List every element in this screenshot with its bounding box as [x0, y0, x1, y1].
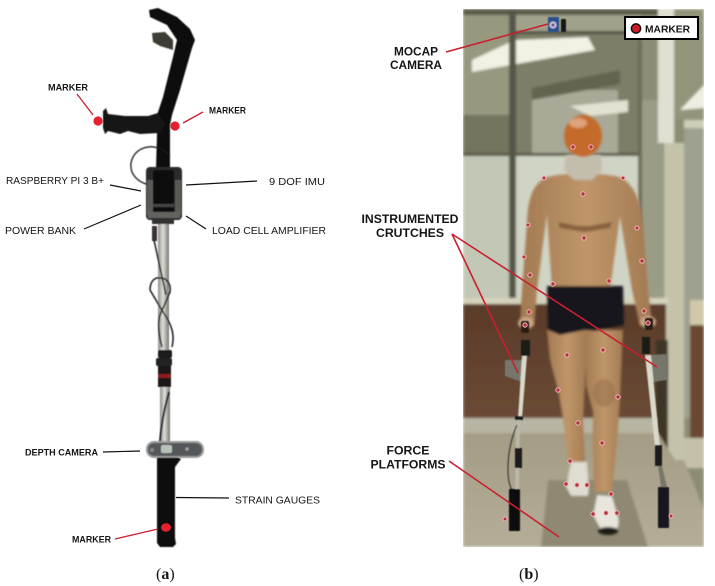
- panel a: instrumented crutch: [5, 8, 326, 583]
- label: instrumented crutches with leaders: CRUTCHES: [376, 228, 444, 240]
- legend: marker: MARKER: [645, 24, 690, 36]
- wire loops: [150, 240, 173, 347]
- label: power bank: [5, 205, 141, 237]
- cable loop: [131, 147, 170, 184]
- neck wrap: [564, 155, 602, 180]
- marker dot: stem: [170, 121, 180, 131]
- label: instrumented crutches with leaders: [362, 214, 657, 373]
- hand grip: [103, 108, 165, 134]
- label: instrumented crutches with leaders: INSTRUMENTED: [362, 214, 458, 226]
- label: depth camera: DEPTH CAMERA: [25, 448, 98, 458]
- upper aluminium tube: [158, 220, 169, 355]
- crutches in photo: [505, 318, 669, 531]
- motion capture camera: [548, 17, 566, 32]
- legs: [547, 330, 587, 462]
- cuff and stem: [149, 8, 195, 168]
- label: marker upper right: [183, 106, 246, 123]
- label: marker bottom: [72, 529, 158, 544]
- person: [518, 115, 656, 535]
- label: 9 dof imu: [186, 176, 325, 188]
- force platform: [541, 480, 648, 547]
- label: marker bottom: MARKER: [72, 534, 111, 544]
- photo scene: [463, 9, 704, 547]
- reflective body markers: [503, 145, 673, 521]
- panel b: motion capture photo: [362, 9, 704, 583]
- caption b: (b): [519, 566, 539, 583]
- label: force platforms with leader: FORCE: [386, 446, 430, 458]
- lower black grip: [157, 456, 181, 547]
- label: force platforms with leader: PLATFORMS: [370, 460, 446, 472]
- label: load cell amplifier: [186, 216, 326, 237]
- background room: [463, 9, 704, 547]
- label: 9 dof imu: 9 DOF IMU: [269, 176, 325, 188]
- lower aluminium tube: [160, 387, 170, 444]
- hands: [518, 317, 534, 329]
- torso and arms: [520, 174, 652, 326]
- label: mocap camera with leader: MOCAP: [394, 46, 438, 58]
- shorts: [547, 286, 624, 335]
- label: marker upper left: MARKER: [48, 82, 89, 92]
- label: raspberry pi: [6, 175, 141, 191]
- crutch photo: [103, 8, 195, 547]
- swim cap head: [564, 115, 602, 157]
- marker dot: bottom of crutch: [161, 523, 171, 532]
- label: depth camera: [25, 448, 140, 458]
- label: mocap camera with leader: CAMERA: [390, 60, 442, 72]
- right crutch: [642, 318, 669, 528]
- label: marker upper right: MARKER: [209, 106, 246, 116]
- label: raspberry pi: RASPBERRY PI 3 B+: [6, 175, 104, 187]
- legend: marker: [625, 17, 698, 39]
- label: strain gauges: STRAIN GAUGES: [235, 494, 320, 506]
- shoes: [566, 462, 589, 496]
- left crutch: [505, 321, 530, 531]
- label: power bank: POWER BANK: [5, 225, 76, 237]
- electronics box: [146, 167, 182, 220]
- depth camera device: [146, 441, 204, 458]
- inner cuff pad: [152, 32, 173, 50]
- label: load cell amplifier: LOAD CELL AMPLIFIER: [212, 225, 326, 237]
- collar with red band: [158, 350, 172, 358]
- label: force platforms with leader: [370, 446, 559, 537]
- label: mocap camera with leader: [390, 24, 548, 72]
- label: marker upper left: [48, 82, 93, 115]
- wire connector: [152, 226, 157, 241]
- marker dot: grip tip: [93, 116, 103, 126]
- caption a: (a): [156, 566, 175, 583]
